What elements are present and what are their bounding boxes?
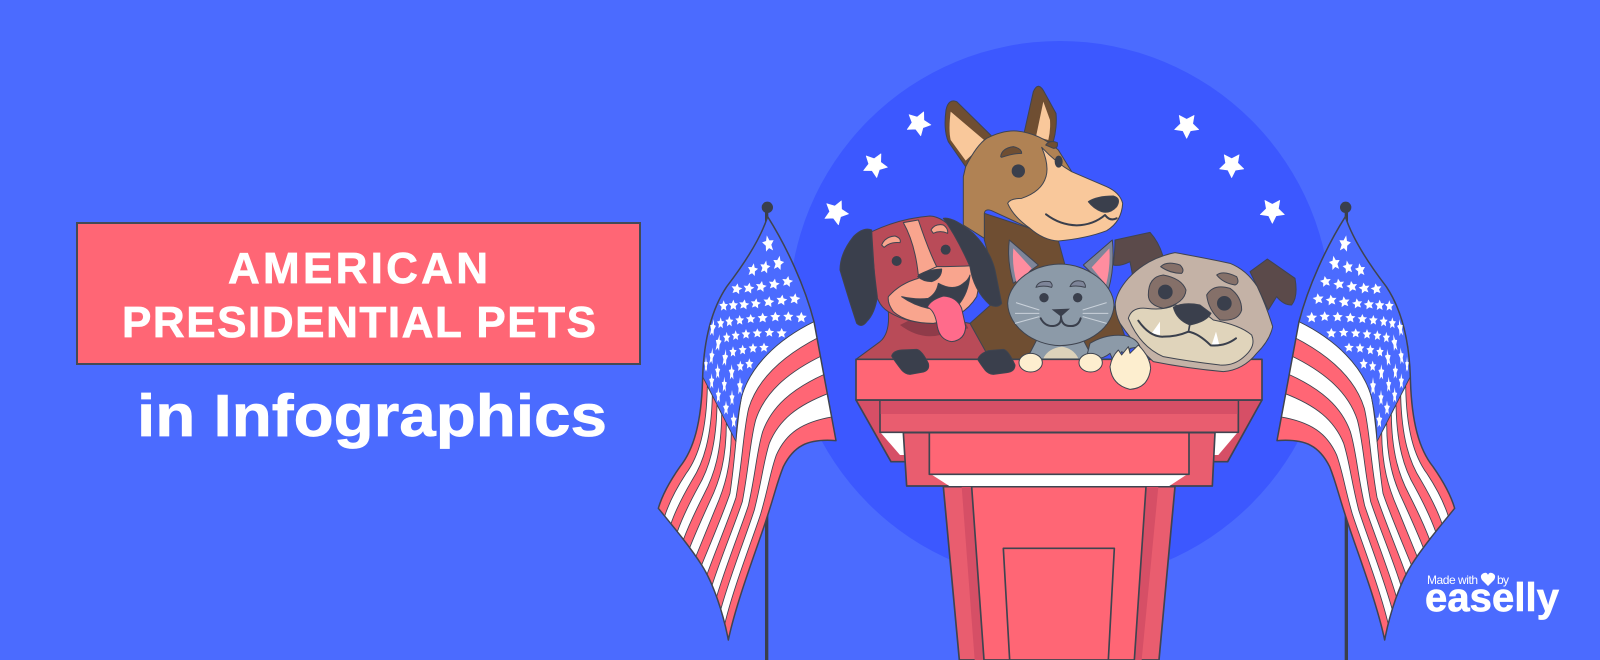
- left flag: [658, 202, 836, 660]
- title banner: AMERICAN: [228, 244, 488, 293]
- red dog: [840, 216, 1002, 359]
- column: [943, 487, 1175, 660]
- pets in front of podium: [892, 240, 1273, 389]
- podium: [856, 359, 1262, 660]
- right flag: [1277, 202, 1455, 660]
- pug ears: [1113, 232, 1296, 310]
- podium top slab: [856, 359, 1262, 400]
- lectern box: [903, 433, 1215, 486]
- doberman dog: [945, 86, 1125, 360]
- pets behind podium: [840, 86, 1296, 360]
- podium underside: [856, 400, 1262, 462]
- easelly logo: by: [1497, 573, 1509, 587]
- dog paws: [892, 349, 1015, 374]
- stars arc: [821, 107, 1290, 227]
- cat: [1008, 240, 1151, 389]
- easelly logo: easelly: [1425, 576, 1560, 620]
- cat body: [1027, 340, 1093, 359]
- subtitle: in Infographics: [137, 383, 607, 449]
- podium band: [880, 401, 1238, 432]
- title banner: [77, 223, 640, 364]
- underside white wedge: [881, 433, 1237, 455]
- title banner: PRESIDENTIAL PETS: [122, 298, 596, 347]
- easelly logo: Made with: [1427, 573, 1478, 587]
- backdrop circle: [789, 41, 1331, 583]
- pug head: [1115, 253, 1273, 372]
